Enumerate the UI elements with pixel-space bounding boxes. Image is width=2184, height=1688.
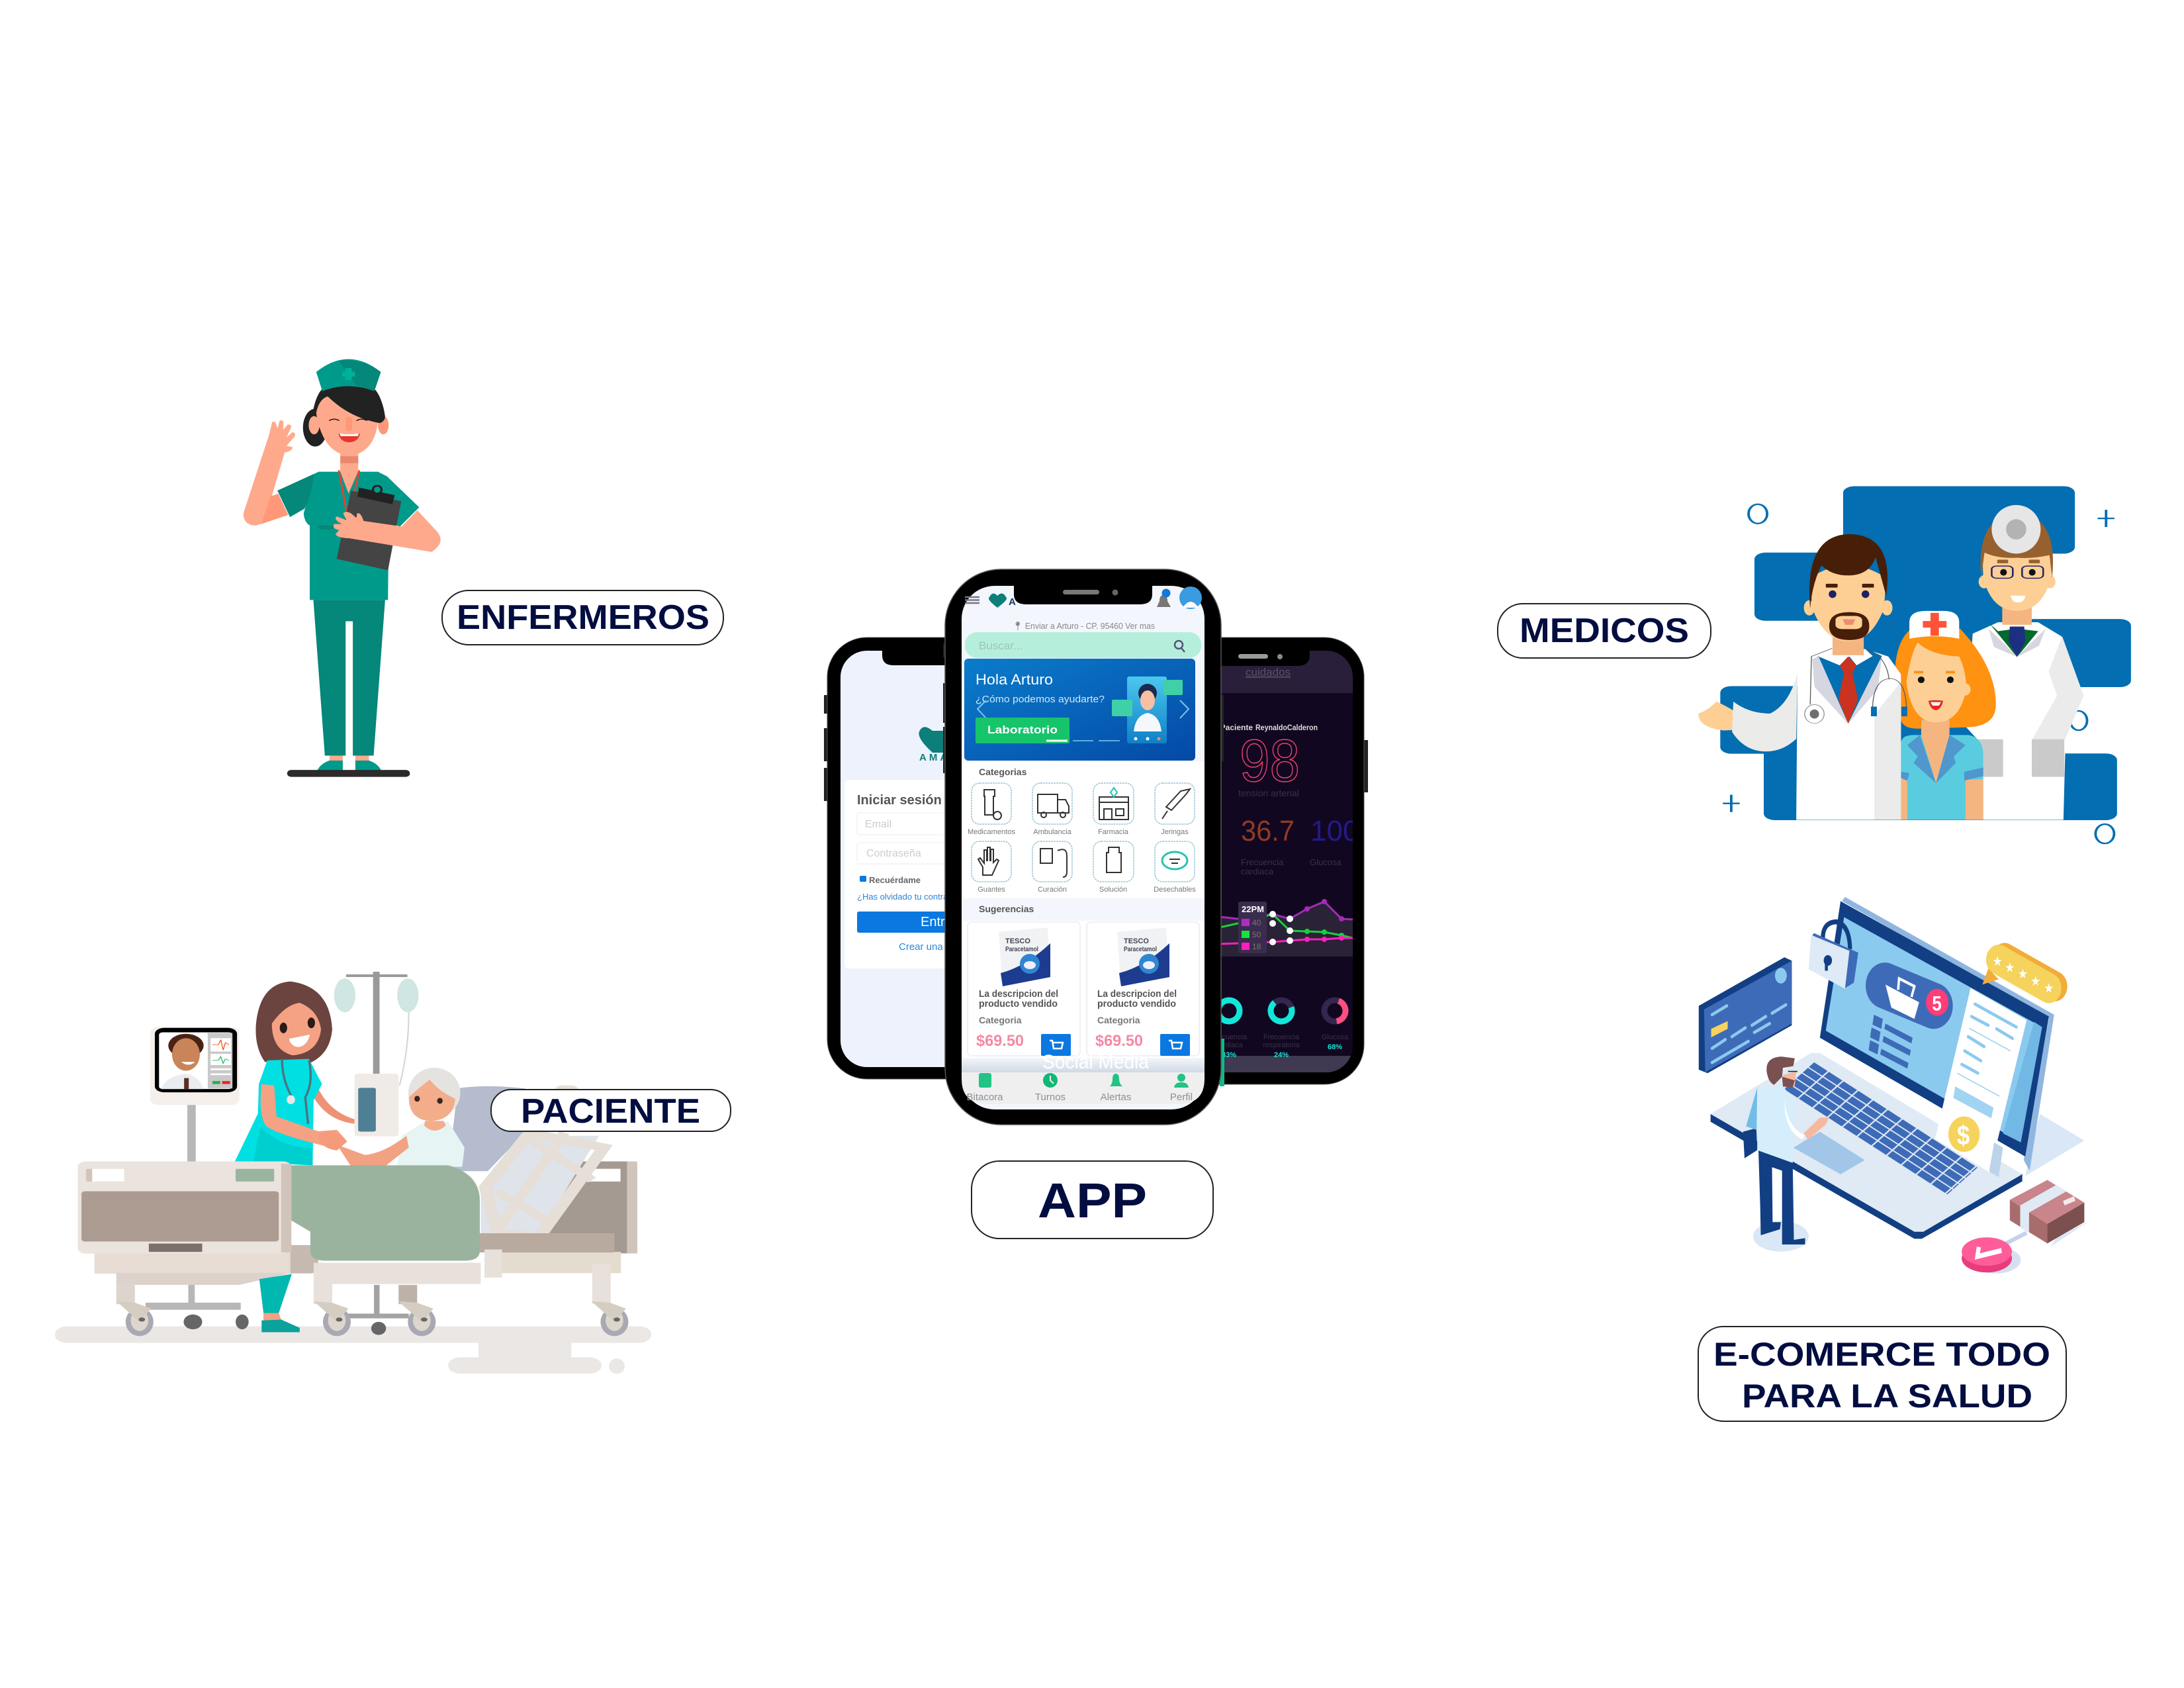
chart tooltip: 18	[1252, 942, 1261, 951]
vitals header text: cuidados	[1246, 666, 1291, 679]
product card 2: $69.50	[1095, 1032, 1143, 1050]
promo banner: Laboratorio	[987, 724, 1058, 736]
patient	[318, 1068, 465, 1167]
label: MEDICOS: MEDICOS	[1520, 612, 1689, 650]
parcel box	[2010, 1180, 2090, 1247]
chart tooltip: 50	[1252, 930, 1261, 939]
screen list rows	[1868, 1015, 1913, 1068]
product card 2: Categoria	[1097, 1015, 1140, 1025]
category labels: Curación	[1038, 886, 1067, 894]
login logo	[919, 727, 950, 763]
screen basket badge	[1885, 978, 1948, 1019]
credit card	[1699, 957, 1792, 1073]
vitals header text: ReynaldoCalderon	[1255, 723, 1318, 732]
floor shape	[55, 1327, 651, 1374]
phone: vital signs screen (right)	[1219, 637, 1368, 1084]
product card 2: producto vendido	[1097, 998, 1176, 1009]
nurse ground bar	[287, 770, 410, 777]
category labels: Solución	[1099, 886, 1127, 894]
product card 1: Paracetamol	[1005, 946, 1038, 953]
caregiver leg and shoe	[259, 1274, 300, 1333]
keyboard	[1783, 1062, 1978, 1195]
donut labels: 33%	[1222, 1051, 1236, 1059]
donut labels	[1222, 1034, 1348, 1057]
suggestions heading: Sugerencias	[979, 904, 1034, 914]
padlock	[1809, 921, 1858, 989]
label: E-COMERCE TODO PARA LA SALUD	[1698, 1327, 2066, 1421]
caregiver body	[235, 1059, 355, 1165]
pillow	[448, 1086, 525, 1171]
donut labels: respiratoria	[1263, 1041, 1300, 1049]
login card: Iniciar sesión	[857, 793, 942, 808]
illustration: medical team	[1698, 487, 2131, 843]
nurse scrubs top	[277, 470, 419, 600]
category labels: Jeringas	[1161, 828, 1189, 836]
category labels	[968, 828, 1196, 894]
top bar	[965, 586, 1202, 609]
login card	[844, 780, 945, 968]
categories section	[962, 761, 1205, 898]
search bar: Buscar...	[979, 639, 1023, 652]
bed wheels	[116, 1285, 629, 1336]
product card 1	[968, 922, 1080, 1056]
rating speech bubble: ★	[2044, 981, 2054, 996]
category labels: Guantes	[978, 886, 1005, 894]
product card 2: TESCO	[1124, 937, 1149, 945]
vitals donut charts	[1218, 997, 1349, 1025]
promo banner: Hola Arturo	[976, 671, 1053, 688]
categories section: Categorias	[979, 767, 1027, 777]
infusion pump	[355, 1074, 398, 1137]
login logo: AMA	[919, 752, 950, 763]
receipt: $	[1957, 1121, 1970, 1151]
nurse cap	[316, 359, 381, 391]
laptop base	[1711, 1053, 2023, 1239]
product card 2: Paracetamol	[1124, 946, 1157, 953]
screen basket badge: 5	[1932, 992, 1942, 1015]
bed base frame	[95, 1233, 621, 1304]
label: MEDICOS	[1498, 604, 1711, 658]
donut labels: Glucosa	[1322, 1033, 1349, 1041]
delivery address: 📍︎ Enviar a Arturo - CP. 95460 Ver mas	[1013, 621, 1155, 631]
bed footboard	[78, 1162, 291, 1254]
login card: Entrar	[921, 915, 957, 929]
caregiver hair	[255, 982, 332, 1064]
customer figure	[1743, 1056, 1829, 1252]
caregiver face	[272, 1003, 321, 1055]
login notch	[882, 649, 973, 665]
vitals line chart	[1220, 899, 1353, 945]
login card: Crear una cuenta	[899, 941, 976, 953]
pink check button	[1962, 1233, 2026, 1274]
product card 1: producto vendido	[979, 998, 1058, 1009]
bottom tab bar: Turnos	[1035, 1092, 1066, 1103]
vitals numbers: Frecuencia	[1241, 857, 1284, 867]
nurse ankles and shoes	[316, 756, 383, 773]
label: PACIENTE: PACIENTE	[521, 1092, 700, 1131]
nurse pants	[313, 600, 385, 756]
category icons	[978, 788, 1190, 877]
laptop lid	[1820, 897, 2054, 1171]
blanket	[291, 1165, 480, 1261]
donut labels: 68%	[1328, 1043, 1342, 1051]
label: ENFERMEROS: ENFERMEROS	[457, 598, 709, 637]
banner doctor card	[1112, 677, 1183, 743]
illustration: nurse	[244, 359, 441, 777]
donut labels: 24%	[1274, 1051, 1289, 1059]
notch	[1014, 583, 1152, 604]
social media watermark: Social Media	[1042, 1051, 1149, 1073]
label: ENFERMEROS	[442, 590, 723, 645]
product card 1: La descripcion del	[979, 988, 1058, 1000]
product card 2	[1087, 922, 1199, 1056]
login card: Contraseña	[866, 848, 921, 859]
rating speech bubble	[1982, 955, 2055, 996]
label: APP: APP	[1038, 1173, 1147, 1228]
chart tooltip	[1238, 902, 1267, 953]
phone: main catalogue screen (centre)	[943, 569, 1224, 1125]
rating speech bubble: ★	[2030, 974, 2040, 989]
product card 1: TESCO	[1005, 937, 1030, 945]
top bar: A	[1009, 596, 1016, 608]
nurse raised arm	[244, 420, 295, 526]
chart tooltip: 22PM	[1242, 904, 1264, 914]
rating speech bubble: ★	[2005, 961, 2015, 976]
label: E-COMERCE TODO PARA LA SALUD: PARA LA SALUD	[1742, 1378, 2032, 1415]
vitals numbers: 98	[1240, 728, 1300, 794]
promo banner	[964, 659, 1195, 761]
nurse arm holding clipboard	[334, 510, 441, 552]
donut labels: Frecuencia	[1211, 1033, 1248, 1041]
promo banner: ¿Cómo podemos ayudarte?	[976, 694, 1105, 705]
category labels: Medicamentos	[968, 828, 1015, 836]
vitals header text	[1220, 666, 1318, 732]
product card 1: $69.50	[976, 1032, 1024, 1050]
receipt	[1935, 988, 2026, 1177]
products section	[962, 921, 1205, 1072]
vitals numbers: cardiaca	[1241, 867, 1274, 876]
video call monitor	[150, 1027, 240, 1162]
doctor with head mirror	[1966, 505, 2083, 820]
illustration: e-commerce laptop	[1699, 897, 2090, 1274]
nurse with red cross cap	[1895, 611, 1996, 820]
category labels: Ambulancia	[1033, 828, 1072, 836]
category labels: Desechables	[1154, 886, 1196, 894]
donut labels: Frecuencia	[1263, 1033, 1300, 1041]
vitals numbers: 36.7	[1241, 815, 1295, 847]
chart tooltip: 40	[1252, 918, 1261, 927]
bottom tab bar: Alertas	[1101, 1092, 1131, 1103]
login card: ¿Has olvidado tu contraseña?	[857, 892, 972, 902]
vitals numbers	[1238, 739, 1353, 874]
bottom tab bar	[962, 1072, 1205, 1104]
vitals notch	[1191, 647, 1310, 666]
donut labels: cardiaca	[1215, 1041, 1244, 1049]
nurse clipboard	[337, 486, 401, 570]
label: E-COMERCE TODO PARA LA SALUD: E-COMERCE TODO	[1713, 1336, 2050, 1373]
label: APP	[972, 1161, 1213, 1239]
rating speech bubble: ★	[2018, 967, 2028, 982]
login card: Recuérdame	[869, 875, 921, 885]
product card 1: Categoria	[979, 1015, 1022, 1025]
search bar	[965, 632, 1201, 658]
IV pole and bags	[334, 972, 418, 1086]
vitals numbers: 100	[1310, 815, 1359, 847]
label: PACIENTE	[491, 1090, 731, 1131]
table plane	[2025, 1114, 2084, 1176]
bottom tab bar: Perfil	[1170, 1092, 1193, 1103]
rating speech bubble: ★	[1993, 955, 2003, 969]
bearded doctor	[1698, 534, 1907, 820]
nurse face	[308, 386, 388, 456]
bottom tab bar: Bitacora	[966, 1092, 1003, 1103]
nurse hair and bun	[303, 386, 385, 446]
product card 2: La descripcion del	[1097, 988, 1177, 1000]
nurse neck	[340, 451, 358, 474]
illustration: patient in hospital bed	[55, 972, 651, 1374]
vitals numbers: Glucosa	[1310, 857, 1342, 867]
category labels: Farmacia	[1098, 828, 1129, 836]
decorative rings and plus signs	[1723, 504, 2115, 843]
vitals numbers: tension arterial	[1238, 788, 1299, 798]
touchpad	[1794, 1132, 1865, 1174]
blue background blocks	[1720, 487, 2131, 820]
login card: Email	[865, 819, 891, 830]
phone: login screen (left)	[824, 637, 946, 1079]
vitals header text: Paciente	[1220, 723, 1253, 732]
bed head with rails	[480, 1086, 637, 1253]
